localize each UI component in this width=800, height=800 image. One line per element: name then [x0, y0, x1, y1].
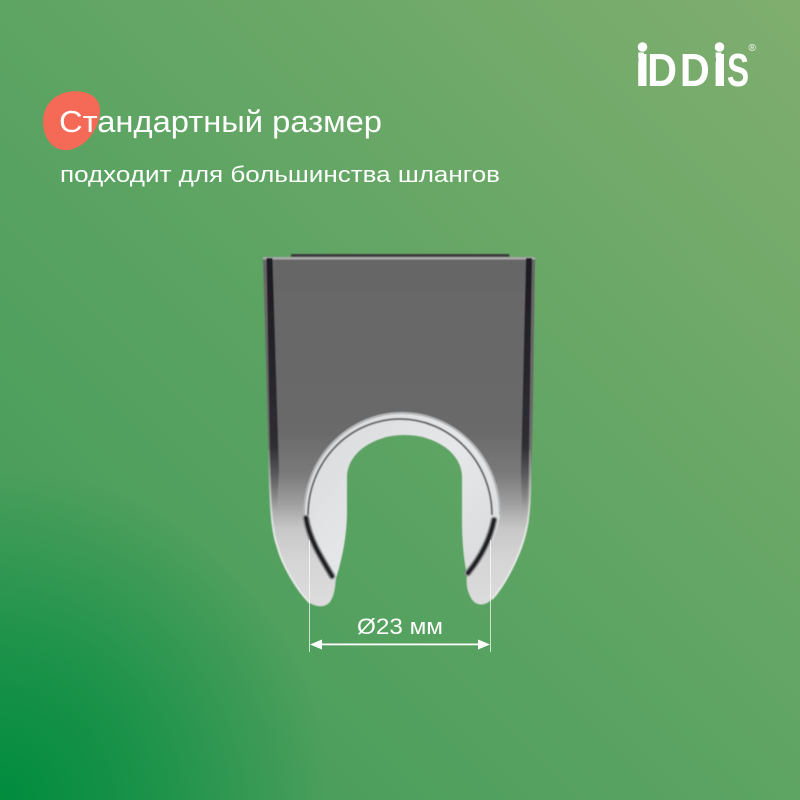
left dark edge — [266, 258, 279, 510]
top edge highlight — [263, 257, 535, 260]
right chrome reflection — [468, 520, 494, 573]
dimension: 23 mm — [310, 540, 490, 652]
right outer rim highlight — [492, 450, 530, 599]
dimension label: Ø23 мм — [357, 614, 443, 639]
heading text: Стандартный размер — [59, 104, 382, 139]
inner light ring — [304, 413, 500, 578]
double arrow — [310, 640, 490, 650]
accent blob — [43, 91, 100, 150]
clip body — [263, 257, 535, 606]
right extension line — [490, 540, 492, 652]
logo letter S: S — [727, 46, 749, 96]
logo letters: iDDi — [635, 45, 724, 97]
registered mark: ® — [748, 43, 756, 54]
logo i stems and dots — [638, 42, 724, 86]
left extension line — [308, 540, 310, 652]
right dark edge — [521, 258, 532, 510]
top back plate — [291, 254, 510, 258]
logo: iDDiS — [635, 42, 756, 97]
ring contour — [308, 419, 492, 515]
heading with accent blob — [43, 91, 382, 150]
product: hose holder clip — [263, 254, 535, 606]
left outer rim highlight — [269, 450, 310, 603]
ring outer rim — [304, 413, 500, 515]
subheading: подходит для большинства шлангов — [60, 162, 500, 187]
left chrome reflection — [306, 518, 332, 576]
